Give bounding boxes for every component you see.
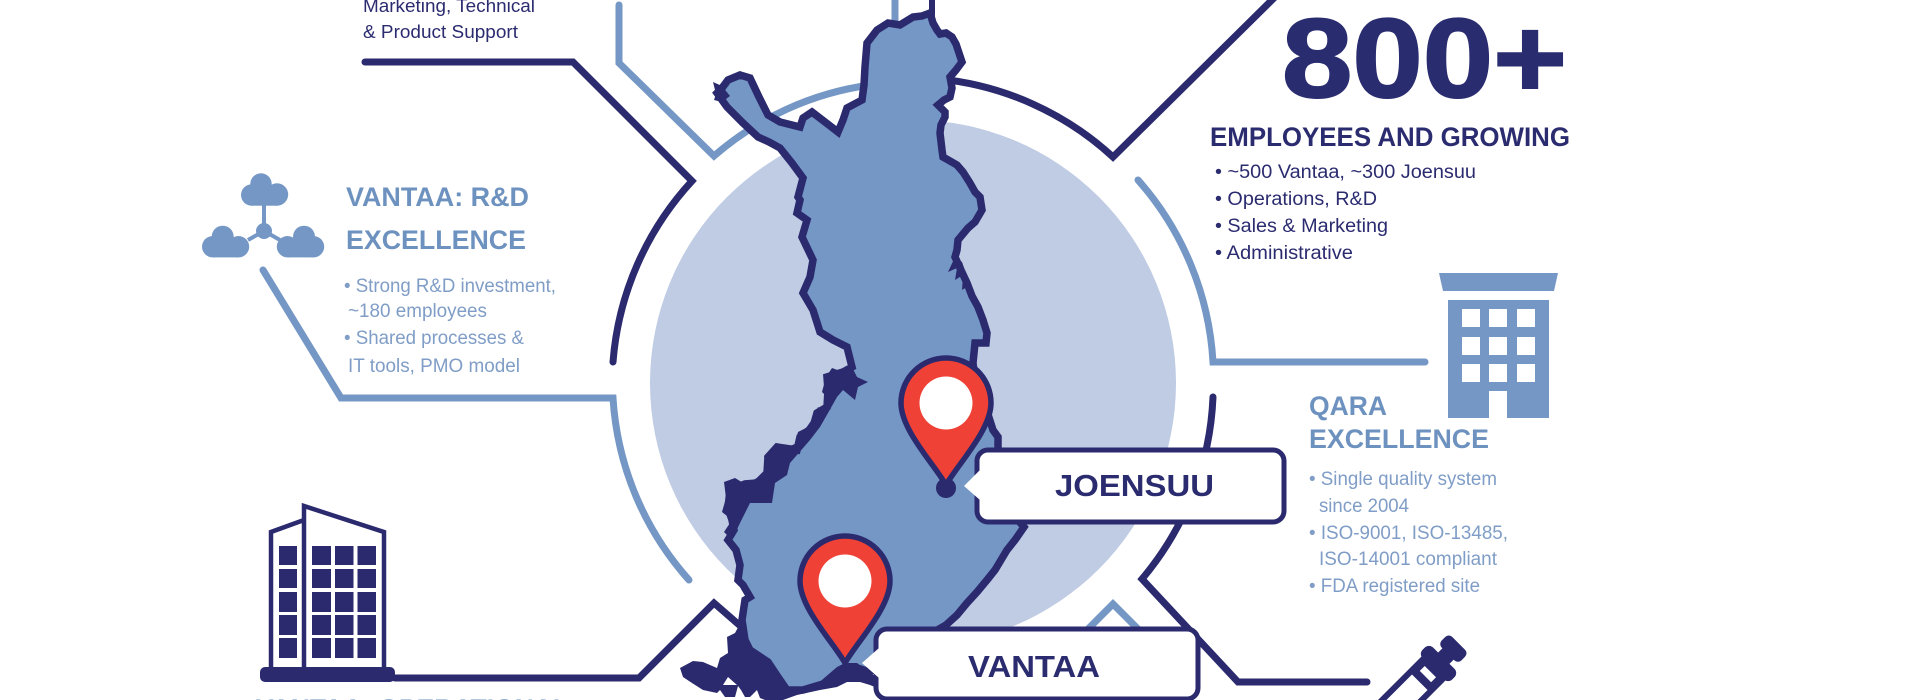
text block: Vantaa R&D bullets: [344, 276, 556, 377]
map: jagged west coast mass: [722, 367, 868, 540]
heading: Vantaa R&D excellence: [346, 182, 529, 255]
connector: top stubs behind map: [895, 0, 932, 26]
connector: sales and support to ring: [365, 62, 692, 362]
text: sales and support: & Product Support: [363, 22, 518, 42]
text: sales and support: [363, 0, 535, 42]
heading: Vantaa R&D excellence: EXCELLENCE: [346, 225, 526, 255]
label: Joensuu: [964, 450, 1284, 522]
text block: QARA bullets: • ISO-9001, ISO-13485,: [1309, 523, 1508, 544]
heading: employees and growing: EMPLOYEES AND GROWING: [1210, 122, 1570, 152]
connector: top light arc: [619, 5, 870, 156]
text block: QARA bullets: • FDA registered site: [1309, 576, 1480, 597]
map: west arm inner spikes: [713, 82, 730, 102]
connector: bottom light chevron: [1085, 604, 1141, 632]
pin: Vantaa: [800, 536, 890, 663]
text block: employee bullets: [1215, 162, 1476, 264]
text block: QARA bullets: [1309, 469, 1508, 597]
icon: QARA building: [1439, 273, 1558, 418]
text block: QARA bullets: since 2004: [1319, 496, 1409, 517]
label: Vantaa: VANTAA: [968, 649, 1100, 684]
pale background circle: [650, 120, 1176, 646]
pin: Joensuu: [901, 358, 991, 498]
text block: employee bullets: • ~500 Vantaa, ~300 Joensuu: [1215, 162, 1476, 183]
heading: Vantaa R&D excellence: VANTAA: R&D: [346, 182, 529, 212]
icon: operations building: [260, 506, 395, 682]
text block: employee bullets: • Sales & Marketing: [1215, 216, 1388, 237]
icon: cloud network: [202, 173, 324, 257]
text block: employee bullets: • Operations, R&D: [1215, 189, 1377, 210]
heading: QARA excellence: [1309, 391, 1489, 454]
icon: syringe: [1366, 628, 1474, 700]
connector: employees to ring: [940, 0, 1276, 157]
map of Finland: [680, 13, 1024, 700]
label: Joensuu: JOENSUU: [1055, 468, 1214, 503]
text block: Vantaa R&D bullets: IT tools, PMO model: [348, 356, 520, 377]
text block: QARA bullets: • Single quality system: [1309, 469, 1497, 490]
connector: syringe to ring: [1142, 397, 1367, 682]
text block: Vantaa R&D bullets: • Strong R&D investment,: [344, 276, 556, 297]
text block: Vantaa R&D bullets: • Shared processes &: [344, 328, 524, 349]
text block: Vantaa R&D bullets: ~180 employees: [348, 301, 487, 322]
text block: QARA bullets: ISO-14001 compliant: [1319, 549, 1498, 570]
connector: R&D to ring: [263, 270, 689, 580]
heading: QARA excellence: QARA: [1309, 391, 1387, 421]
map: south coast mass: [680, 620, 880, 700]
map: small inlet in the archipelago: [723, 677, 737, 685]
text block: employee bullets: • Administrative: [1215, 243, 1353, 264]
connector: operations building to ring: [395, 603, 745, 678]
map: east coast spikes: [948, 257, 970, 290]
heading: QARA excellence: EXCELLENCE: [1309, 424, 1489, 454]
connector: QARA to ring: [1138, 180, 1425, 362]
label: Vantaa: [862, 629, 1198, 699]
